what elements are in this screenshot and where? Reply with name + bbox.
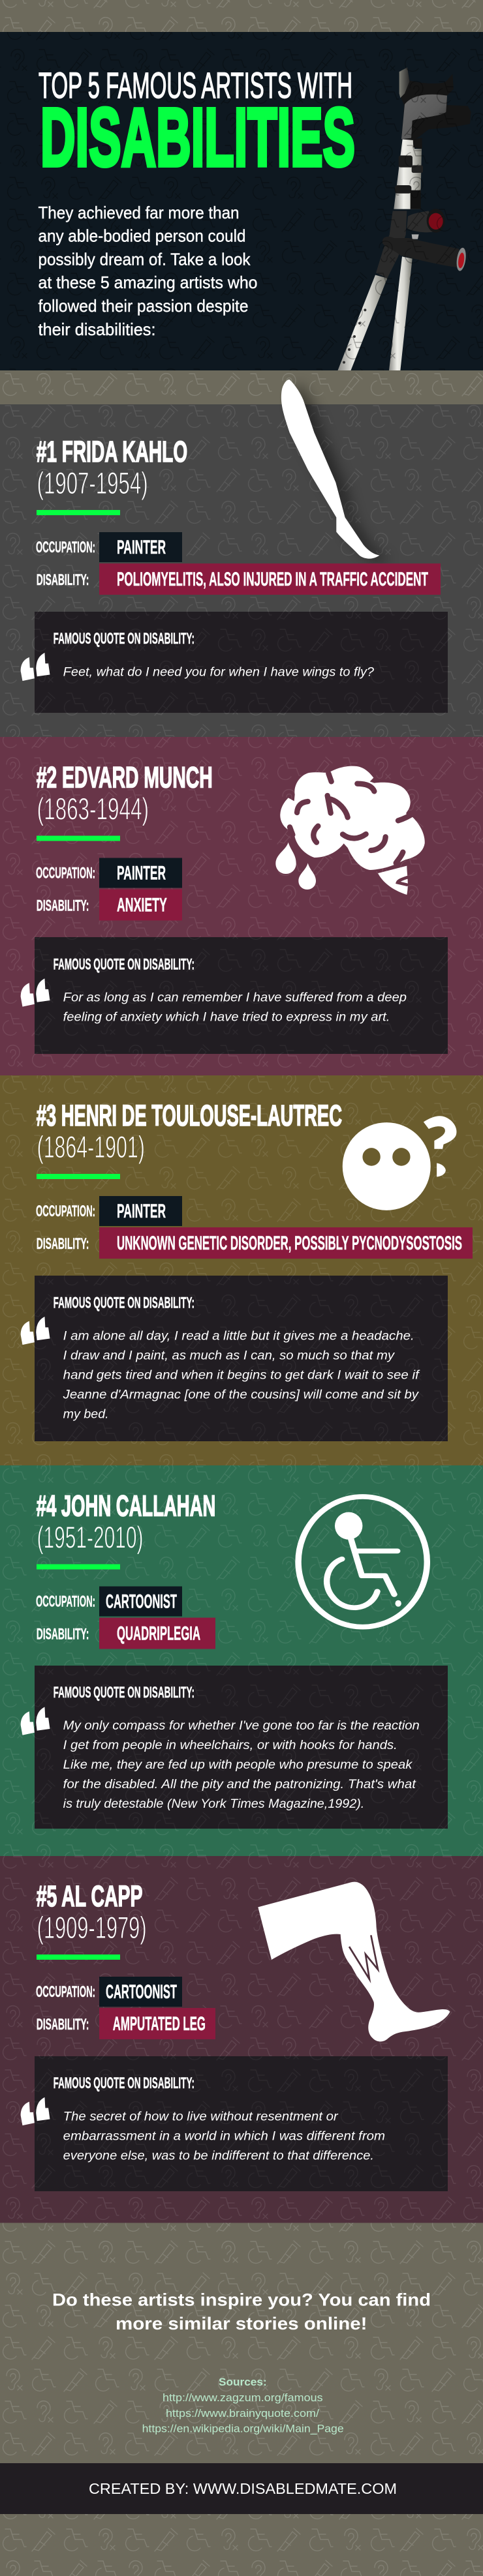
- quote box: everyone else, was to be indifferent to that difference.: [63, 2149, 374, 2163]
- occupation row: CARTOONIST: [106, 1981, 177, 2003]
- disability row: [37, 563, 441, 595]
- quote box: I get from people in wheelchairs, or with hooks for hands.: [63, 1739, 397, 1752]
- quote box: [21, 1276, 448, 1441]
- sources: [142, 2376, 344, 2435]
- disability row: [37, 1227, 473, 1259]
- quote box: Feet, what do I need you for when I have wings to fly?: [63, 665, 374, 680]
- occupation row: [36, 858, 182, 888]
- call to action: Do these artists inspire you? You can find: [52, 2290, 431, 2310]
- quote box: [21, 937, 448, 1054]
- quote box: FAMOUS QUOTE ON DISABILITY:: [54, 2074, 195, 2092]
- occupation row: [36, 1586, 182, 1616]
- panel: #5 Al Capp: [0, 1856, 483, 2223]
- sources: https://www.brainyquote.com/: [166, 2407, 319, 2419]
- quote box: for the disabled. All the pity and the patronizing. That's what: [63, 1778, 416, 1791]
- occupation row: OCCUPATION:: [36, 1203, 95, 1220]
- intro text: They achieved far more than: [38, 203, 239, 222]
- intro text: at these 5 amazing artists who: [38, 273, 257, 292]
- name heading: #2 EDVARD MUNCH: [37, 760, 213, 794]
- disability row: ANXIETY: [117, 895, 167, 916]
- sources: Sources:: [219, 2376, 267, 2388]
- icon: quotation marks: [21, 653, 50, 681]
- occupation row: OCCUPATION:: [36, 865, 95, 882]
- disability row: AMPUTATED LEG: [113, 2013, 206, 2035]
- panel: header: [0, 32, 483, 370]
- quote box: feeling of anxiety which I have tried to express in my art.: [63, 1011, 390, 1024]
- icon: wheelchair in circle: [298, 1497, 427, 1627]
- icon: quotation marks: [21, 2097, 50, 2125]
- call to action: [52, 2290, 431, 2333]
- dates: (1951-2010): [37, 1520, 143, 1555]
- disability row: DISABILITY:: [37, 571, 89, 589]
- quote box: [21, 2056, 448, 2191]
- name heading: #1 FRIDA KAHLO: [37, 435, 187, 468]
- quote box: FAMOUS QUOTE ON DISABILITY:: [54, 956, 195, 973]
- quote box: Jeanne d'Armagnac [one of the cousins] will come and sit by: [63, 1388, 420, 1402]
- disability row: DISABILITY:: [37, 2016, 89, 2033]
- panel: #2 Edvard Munch: [0, 737, 483, 1075]
- panel: #4 John Callahan: [0, 1465, 483, 1856]
- icon: confused face: [343, 1116, 457, 1210]
- panel: footer: [0, 2223, 483, 2576]
- icon: foot: [281, 380, 390, 563]
- disability row: DISABILITY:: [37, 1625, 89, 1643]
- dates: (1907-1954): [37, 466, 148, 500]
- intro text: possibly dream of. Take a look: [38, 249, 251, 269]
- name heading: #4 JOHN CALLAHAN: [37, 1490, 215, 1522]
- green accent bar: [37, 1564, 120, 1569]
- occupation row: OCCUPATION:: [36, 1593, 95, 1611]
- disability row: QUADRIPLEGIA: [117, 1623, 200, 1645]
- call to action: more similar stories online!: [116, 2314, 367, 2333]
- quote box: FAMOUS QUOTE ON DISABILITY:: [54, 1684, 195, 1701]
- quote box: For as long as I can remember I have suffered from a deep: [63, 991, 407, 1004]
- green accent bar: [37, 510, 120, 515]
- credit bar: CREATED BY: WWW.DISABLEDMATE.COM: [89, 2480, 397, 2497]
- occupation row: [36, 1977, 182, 2007]
- quote box: FAMOUS QUOTE ON DISABILITY:: [54, 1294, 195, 1312]
- icon: quotation marks: [21, 1317, 50, 1345]
- disability row: [37, 1617, 215, 1649]
- panel: #3 Henri de Toulouse-Lautrec: [0, 1075, 483, 1465]
- green accent bar: [37, 1174, 120, 1179]
- green accent bar: [37, 836, 120, 841]
- occupation row: PAINTER: [117, 862, 166, 884]
- occupation row: [36, 1196, 182, 1226]
- occupation row: OCCUPATION:: [36, 1983, 95, 2001]
- intro text: [38, 203, 257, 339]
- disability row: [37, 890, 182, 921]
- quote box: my bed.: [63, 1407, 109, 1422]
- quote box: is truly detestable (New York Times Magazine,1992).: [63, 1797, 364, 1811]
- name heading: #5 AL CAPP: [37, 1880, 143, 1913]
- disability row: DISABILITY:: [37, 897, 89, 914]
- icon: quotation marks: [21, 978, 50, 1007]
- dates: (1864-1901): [37, 1130, 145, 1164]
- quote box: embarrassment in a world in which I was different from: [63, 2130, 385, 2143]
- icon: melting brain: [275, 766, 425, 895]
- disability row: [37, 2008, 215, 2039]
- quote box: hand gets tired and when it begins to get dark I wait to see if: [63, 1368, 420, 1383]
- title: [39, 65, 355, 183]
- occupation row: OCCUPATION:: [36, 539, 95, 556]
- quote box: The secret of how to live without resentment or: [63, 2110, 338, 2123]
- occupation row: PAINTER: [117, 1201, 166, 1222]
- panel: top band: [0, 0, 483, 32]
- icon: forearm crutch: [337, 67, 471, 370]
- quote box: I draw and I paint, as much as I can, so much so that my: [63, 1349, 396, 1363]
- quote box: [21, 1666, 448, 1829]
- intro text: followed their passion despite: [38, 296, 248, 316]
- icon: amputated leg: [258, 1882, 450, 2041]
- intro text: their disabilities:: [38, 320, 155, 339]
- quote box: Like me, they are fed up with people who presume to speak: [63, 1758, 413, 1772]
- intro text: any able-bodied person could: [38, 226, 245, 245]
- icon: quotation marks: [21, 1707, 50, 1735]
- disability row: DISABILITY:: [37, 1235, 89, 1253]
- sources: https://en.wikipedia.org/wiki/Main_Page: [142, 2422, 344, 2435]
- occupation row: CARTOONIST: [106, 1591, 177, 1612]
- quote box: My only compass for whether I've gone too far is the reaction: [63, 1719, 420, 1733]
- quote box: [21, 612, 448, 713]
- dates: (1863-1944): [37, 792, 149, 826]
- panel: #1 Frida Kahlo: [0, 370, 483, 737]
- occupation row: [36, 532, 182, 562]
- green accent bar: [37, 1954, 120, 1960]
- occupation row: PAINTER: [117, 537, 166, 558]
- credit bar: [0, 2463, 483, 2514]
- quote box: I am alone all day, I read a little but it gives me a headache.: [63, 1329, 414, 1343]
- quote box: FAMOUS QUOTE ON DISABILITY:: [54, 630, 195, 648]
- sources: http://www.zagzum.org/famous: [163, 2391, 323, 2404]
- dates: (1909-1979): [37, 1910, 147, 1945]
